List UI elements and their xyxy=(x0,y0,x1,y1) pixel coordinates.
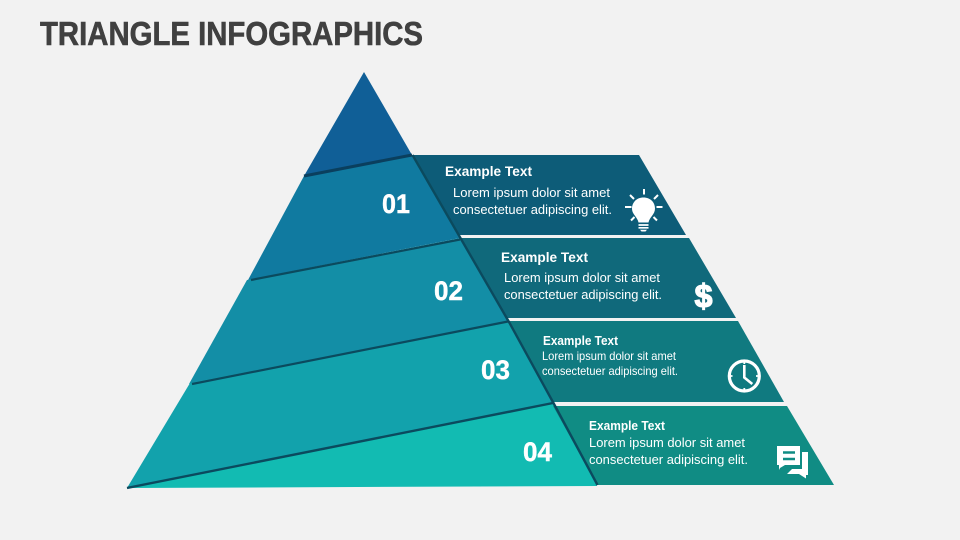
panel 03 body text: Lorem ipsum dolor sit amet xyxy=(542,349,677,363)
panel 02 heading: Example Text xyxy=(501,249,588,265)
pyramid tier 01 xyxy=(248,155,460,280)
panel 02 body text: consectetuer adipiscing elit. xyxy=(504,287,662,302)
title: TRIANGLE INFOGRAPHICS xyxy=(40,15,423,52)
panel 04 body text xyxy=(589,435,748,467)
icon: speech bubbles xyxy=(777,446,808,478)
icon: light bulb xyxy=(625,189,662,232)
panel 02 xyxy=(460,238,736,318)
icon: dollar sign: $ xyxy=(695,278,713,314)
panel 04 body text: Lorem ipsum dolor sit amet xyxy=(589,435,745,450)
panel 01 xyxy=(412,155,686,235)
pyramid tier 03 xyxy=(127,321,553,488)
panel 03 body text: consectetuer adipiscing elit. xyxy=(542,364,678,378)
pyramid tier 01: 01 xyxy=(382,189,410,219)
panel 01 body text: Lorem ipsum dolor sit amet xyxy=(453,185,610,200)
panel 01 body text: consectetuer adipiscing elit. xyxy=(453,202,612,217)
icon: clock xyxy=(729,361,759,391)
pyramid tier 04: 04 xyxy=(523,437,552,467)
pyramid tier 04 xyxy=(127,403,597,488)
panel 03 xyxy=(508,321,784,402)
pyramid tier 02: 02 xyxy=(434,276,463,306)
panel 03 heading: Example Text xyxy=(543,333,619,348)
panel 01 heading: Example Text xyxy=(445,163,532,179)
pyramid tier 02 xyxy=(189,238,508,384)
panel 04 heading: Example Text xyxy=(589,418,666,433)
separator lines between pyramid tiers xyxy=(127,155,598,488)
pyramid tier: apex xyxy=(304,72,412,176)
panel 04 body text: consectetuer adipiscing elit. xyxy=(589,452,748,467)
pyramid tier 03: 03 xyxy=(481,355,510,385)
panel 02 body text xyxy=(504,270,662,302)
panel 02 body text: Lorem ipsum dolor sit amet xyxy=(504,270,660,285)
panel 03 body text xyxy=(542,349,678,378)
panel 04 xyxy=(553,406,834,485)
pyramid xyxy=(127,72,597,488)
panel 01 body text xyxy=(453,185,612,217)
